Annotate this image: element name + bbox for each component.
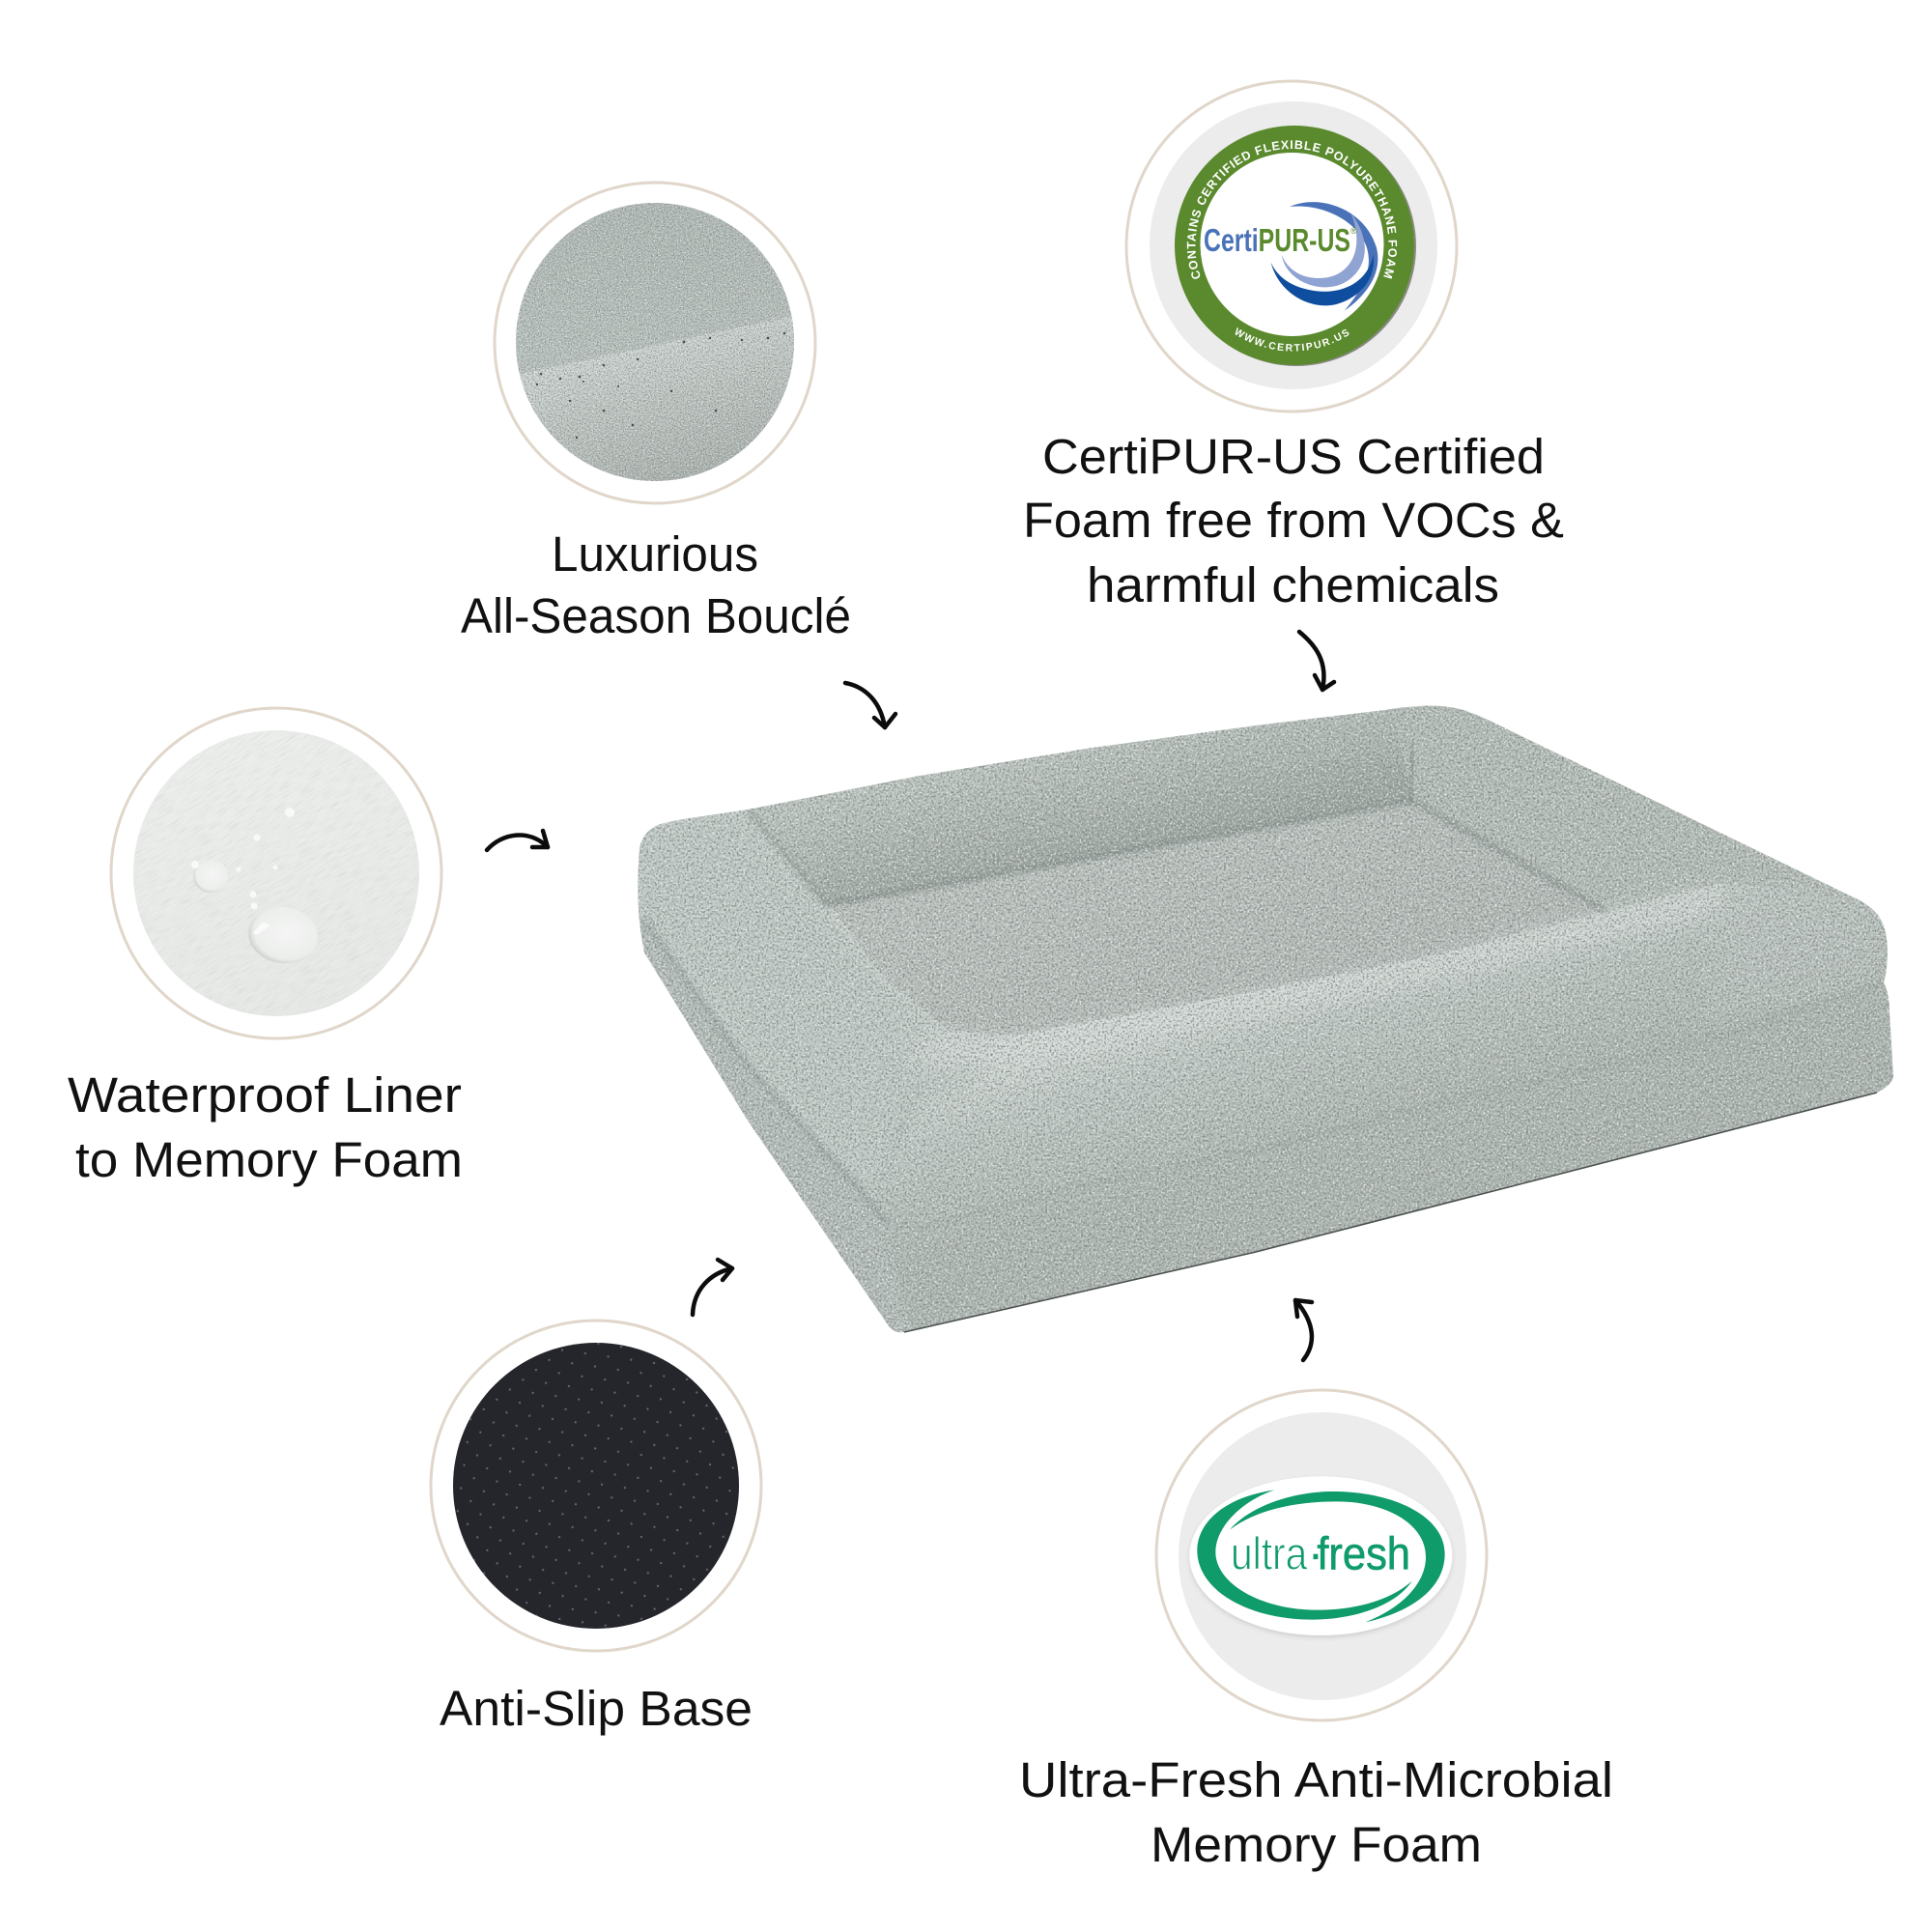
heading: Ultra-Fresh Anti-Microbial bbox=[1019, 1752, 1613, 1807]
heading: Memory Foam bbox=[1151, 1817, 1482, 1872]
swatch: waterproof liner with water drops bbox=[0, 560, 591, 1189]
swatch: bouclé fabric close-up bbox=[512, 199, 802, 488]
heading: Luxurious bbox=[552, 526, 758, 582]
panel: Anti-Slip Base bbox=[431, 1321, 761, 1736]
heading: Anti-Slip Base bbox=[440, 1681, 753, 1736]
heading: All-Season Bouclé bbox=[461, 588, 851, 643]
CertiPUR-US badge logo: WWW.CERTIPUR.US bbox=[1235, 327, 1349, 352]
CertiPUR-US badge logo: CONTAINS CERTIFIED FLEXIBLE POLYURETHANE FOAM bbox=[1186, 140, 1397, 279]
panel: Ultra-Fresh Anti-Microbial Memory Foam bbox=[1019, 1390, 1613, 1872]
ring bbox=[111, 708, 441, 1038]
ring bbox=[495, 183, 815, 503]
CertiPUR-US badge logo bbox=[1175, 126, 1416, 366]
bed base silhouette bbox=[638, 706, 1893, 1332]
heading: CertiPUR-US Certified bbox=[1042, 429, 1545, 484]
panel: Luxurious All-Season Bouclé bbox=[461, 183, 851, 643]
panel: CertiPUR-US Certified Foam bbox=[1023, 79, 1564, 612]
arrow: CertiPUR to bed bbox=[1299, 632, 1334, 690]
heading: Foam free from VOCs & bbox=[1023, 493, 1564, 548]
back rail inner wall bbox=[748, 708, 1425, 905]
product photo: bouclé bolster dog bed bbox=[618, 696, 1903, 1343]
left rail top bbox=[638, 810, 977, 1138]
arrow: waterproof liner to bed bbox=[487, 831, 548, 850]
seam shadows bbox=[644, 918, 886, 1222]
right end cap shading bbox=[1825, 966, 1863, 980]
ultra-fresh oval logo: fresh bbox=[1317, 1529, 1410, 1580]
right rail top bbox=[1391, 705, 1860, 911]
grey backing disc bbox=[1150, 101, 1437, 389]
heading bbox=[1019, 1752, 1613, 1872]
sleeping floor bbox=[831, 801, 1605, 1037]
ring bbox=[1126, 81, 1457, 412]
left lower side bbox=[638, 913, 913, 1338]
bed underside dark edge bbox=[904, 1093, 1877, 1332]
panel: Waterproof Liner to Memory Foam bbox=[0, 560, 591, 1189]
heading bbox=[1023, 429, 1564, 612]
arrow: bouclé to bed bbox=[845, 683, 895, 727]
ultra-fresh oval logo: · bbox=[1308, 1529, 1323, 1580]
fabric noise texture bbox=[628, 696, 1903, 1343]
front rail highlight bbox=[903, 887, 1739, 1067]
swatch: black dotted anti-slip fabric bbox=[449, 1339, 743, 1633]
ultra-fresh oval logo bbox=[1189, 1476, 1452, 1635]
CertiPUR-US badge logo: ® bbox=[1350, 226, 1357, 236]
arrow: anti-slip base to bed bbox=[693, 1260, 732, 1315]
heading: to Memory Foam bbox=[75, 1132, 463, 1187]
heading bbox=[68, 1067, 463, 1187]
grey backing disc bbox=[1179, 1412, 1466, 1700]
arrow: ultra-fresh to bed bbox=[1295, 1300, 1312, 1360]
heading: Waterproof Liner bbox=[68, 1067, 462, 1122]
heading bbox=[461, 526, 851, 643]
CertiPUR-US badge logo: CertiPUR-US bbox=[1204, 222, 1350, 258]
bed shaded surfaces bbox=[618, 696, 1903, 1343]
ring bbox=[431, 1321, 761, 1651]
ring bbox=[1156, 1390, 1487, 1720]
heading: harmful chemicals bbox=[1087, 557, 1499, 612]
ultra-fresh oval logo: ultra bbox=[1231, 1529, 1308, 1580]
